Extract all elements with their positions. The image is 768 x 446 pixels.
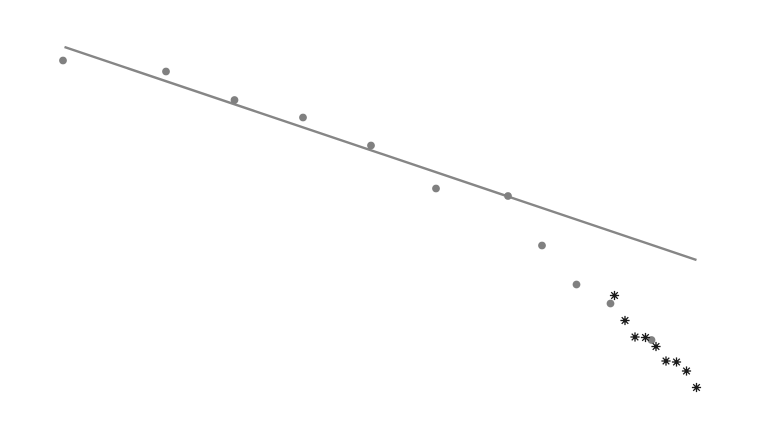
trend line: [64, 47, 696, 260]
black star data points: [610, 291, 701, 392]
grey data points: [59, 57, 655, 344]
